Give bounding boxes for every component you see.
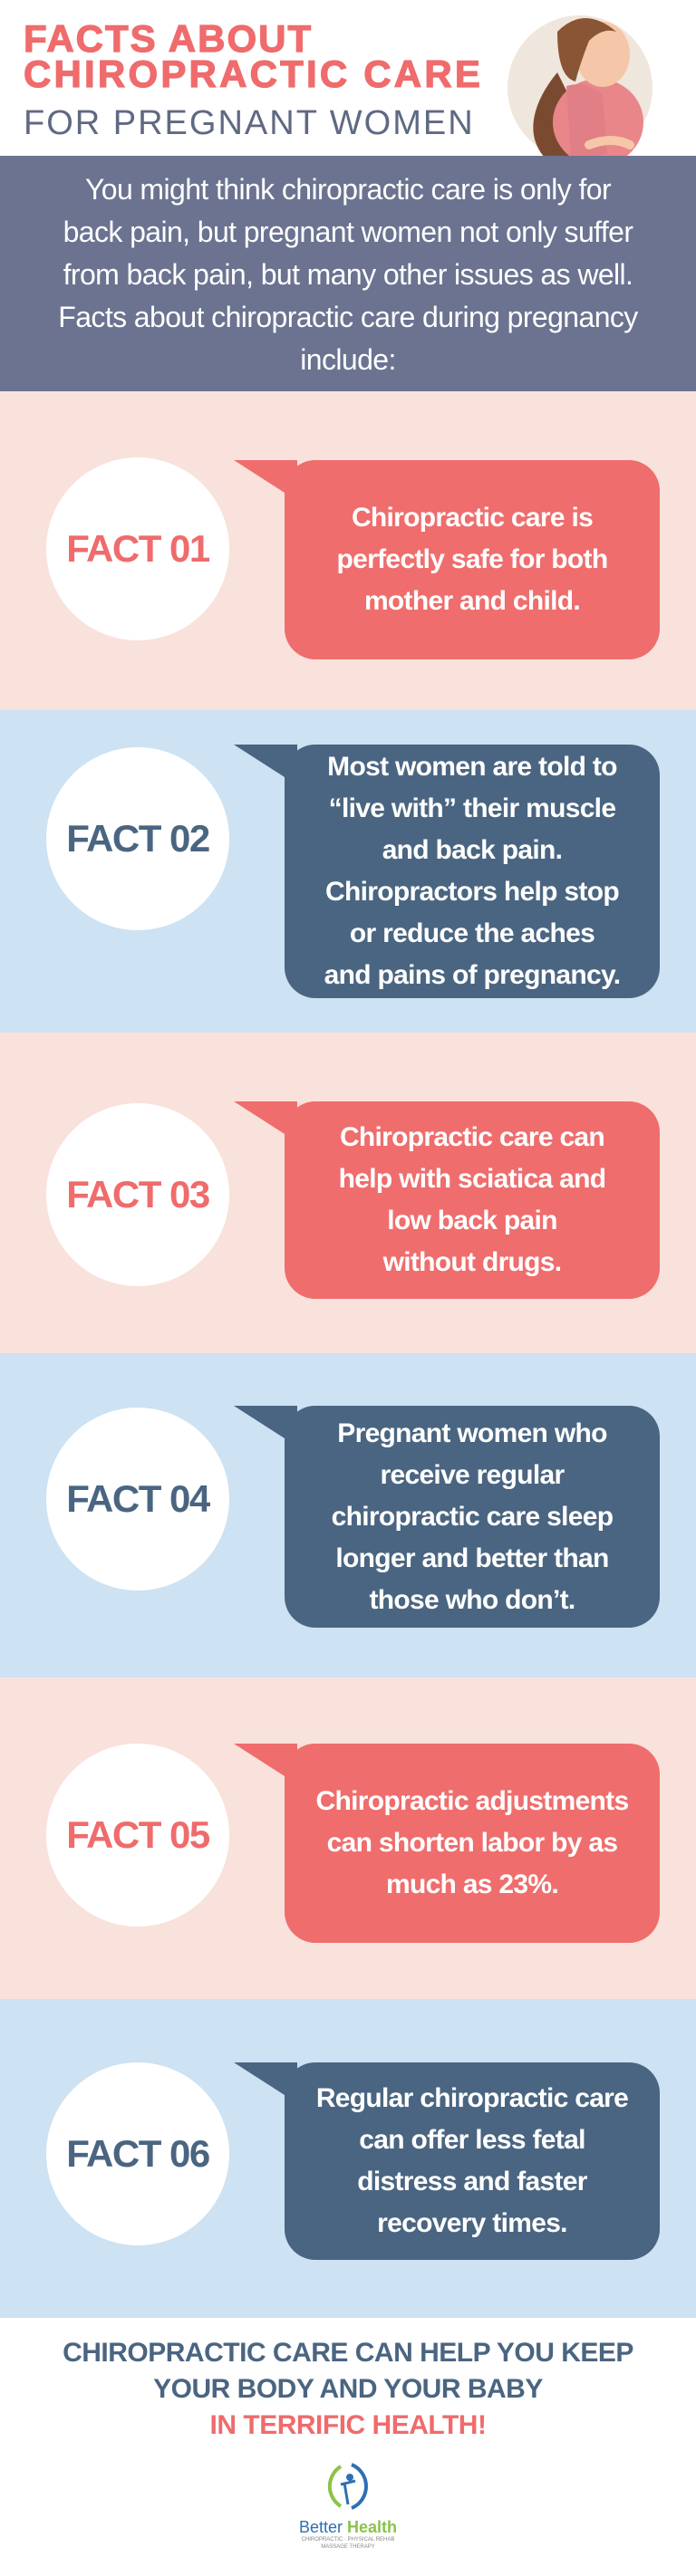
closing message: YOUR BODY AND YOUR BABY [153,2374,543,2404]
bubble text 04: longer and better than [335,1543,609,1572]
bubble text 03: low back pain [387,1206,557,1235]
bubble text 02: and pains of pregnancy. [324,960,620,990]
bubble text 06: can offer less fetal [359,2125,585,2155]
closing message [63,2338,633,2440]
intro panel: back pain, but pregnant women not only suffer [63,216,633,248]
panel: fact 04 [0,1353,696,1677]
bubble text 01: Chiropractic care is [352,503,593,533]
bubble text 03 [285,1101,660,1299]
logo: Better Health [299,2518,397,2536]
panel: fact 01 [0,391,696,710]
closing message: CHIROPRACTIC CARE CAN HELP YOU KEEP [63,2338,633,2368]
fact label 03 [46,1103,229,1286]
bubble text 02: Chiropractors help stop [325,877,619,907]
bubble text 06: Regular chiropractic care [316,2083,628,2113]
intro panel: Facts about chiropractic care during pregnancy [58,301,638,333]
title: FOR PREGNANT WOMEN [24,104,475,142]
icon: pregnant woman [508,15,652,156]
bubble text 02: and back pain. [382,835,562,865]
bubble text 06: recovery times. [377,2208,567,2238]
panel: fact 06 [0,1999,696,2318]
fact label 05 [46,1744,229,1927]
fact label 02: FACT 02 [66,817,209,860]
bubble text 05 [285,1744,660,1943]
logo: CHIROPRACTIC · PHYSICAL REHAB [302,2537,394,2542]
bubble text 04: receive regular [381,1460,564,1489]
intro panel: You might think chiropractic care is only for [85,173,611,206]
tail [234,460,297,493]
bubble text 01 [285,460,660,659]
bubble text 02 [285,745,660,998]
bubble text 03: help with sciatica and [339,1164,605,1194]
fact label 05: FACT 05 [66,1813,209,1856]
bubble text 04 [285,1406,660,1628]
fact label 03: FACT 03 [66,1173,209,1216]
bubble text 05: much as 23%. [386,1870,558,1899]
intro panel: from back pain, but many other issues as well. [63,258,633,291]
title [24,17,483,142]
bubble text 05: can shorten labor by as [327,1828,617,1858]
title: FACTS ABOUT [24,17,313,60]
bubble text 04: Pregnant women who [337,1418,607,1447]
fact label 01: FACT 01 [66,527,209,570]
bubble text 02: “live with” their muscle [329,793,615,823]
bubble text 02: or reduce the aches [350,918,594,948]
bubble text 04: chiropractic care sleep [332,1502,613,1531]
panel: fact 05 [0,1677,696,1999]
fact label 01 [46,457,229,640]
intro panel [0,156,696,391]
bubble text 04: those who don’t. [369,1585,575,1614]
bubble text 01: mother and child. [364,586,580,616]
fact label 04: FACT 04 [66,1477,209,1520]
intro panel: include: [300,343,396,376]
bubble text 06 [285,2062,660,2260]
bubble text 01: perfectly safe for both [337,544,607,574]
panel: fact 03 [0,1033,696,1353]
bubble text 05: Chiropractic adjustments [316,1786,628,1816]
closing message: IN TERRIFIC HEALTH! [210,2410,486,2440]
logo [299,2463,397,2550]
bubble text 03: Chiropractic care can [340,1122,604,1152]
title: CHIROPRACTIC CARE [24,53,483,95]
bubble text 03: without drugs. [383,1247,561,1277]
logo: MASSAGE THERAPY [321,2544,375,2550]
fact label 04 [46,1408,229,1591]
fact label 06 [46,2062,229,2245]
panel: fact 02 [0,710,696,1033]
bubble text 02: Most women are told to [327,752,617,782]
bubble text 06: distress and faster [357,2167,587,2196]
fact label 06: FACT 06 [66,2132,209,2175]
fact label 02 [46,747,229,930]
